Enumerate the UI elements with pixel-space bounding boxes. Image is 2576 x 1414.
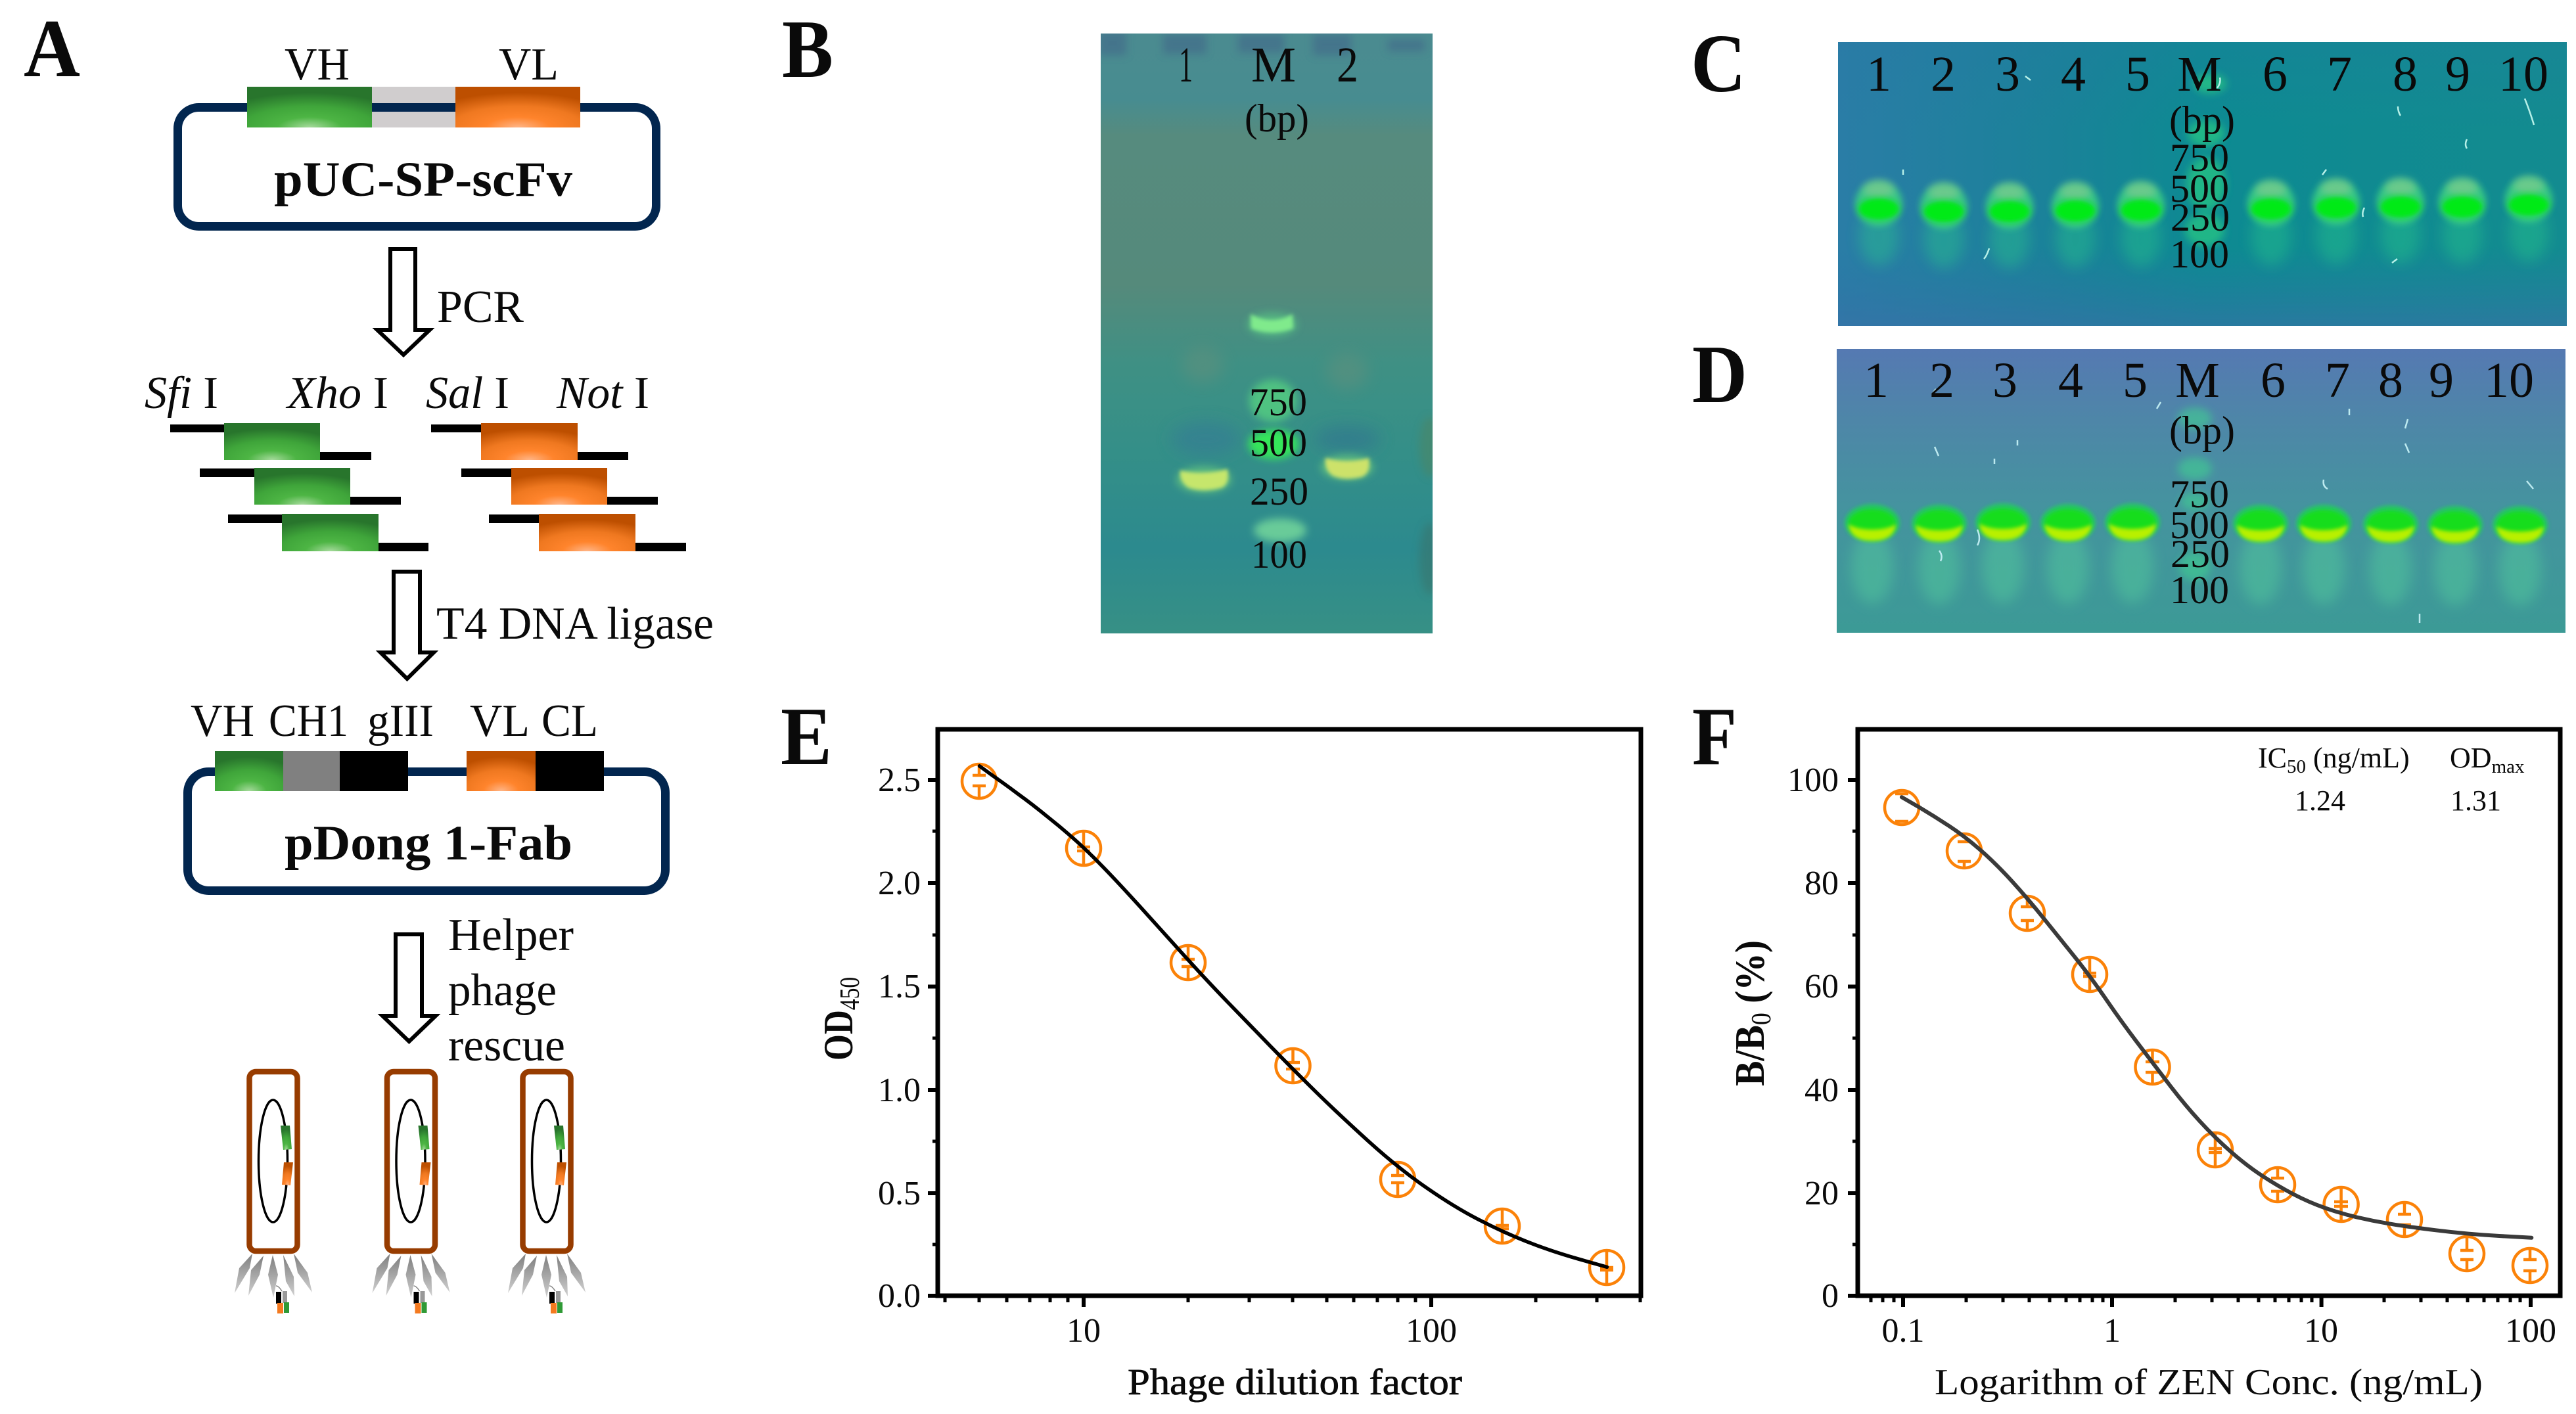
restriction site labels: Xho I xyxy=(285,368,388,419)
icon: E. coli cell 2 displaying Fab xyxy=(372,1072,449,1313)
legend values: 1.31 xyxy=(2450,785,2501,817)
gel image B: 500 xyxy=(1250,421,1307,465)
y tick labels: 100 xyxy=(1787,762,1839,799)
panel A: Fab library construction scheme xyxy=(24,3,714,1313)
gel image D: 6 xyxy=(2261,353,2286,408)
gel image B: 250 xyxy=(1250,470,1308,513)
gel image C: 1 xyxy=(1866,47,1891,102)
gel image D: 250 xyxy=(2171,532,2230,576)
lanes 1-10 bands xyxy=(1845,503,2548,606)
restriction site labels: Sal I xyxy=(426,368,509,419)
y tick labels: 80 xyxy=(1805,865,1839,902)
gel image C: M xyxy=(2177,47,2222,102)
y tick labels: 0.0 xyxy=(878,1277,921,1315)
gel image D: 3 xyxy=(1992,353,2017,408)
panel D: gel with VL products xyxy=(1692,329,2565,633)
gel image D: 1 xyxy=(1864,353,1889,408)
marker bands xyxy=(1247,313,1306,542)
plasmid: pDong 1-Fab: CL xyxy=(541,696,598,746)
restriction site labels xyxy=(145,368,649,419)
x tick labels: 10 xyxy=(1067,1312,1101,1350)
arrow: PCR xyxy=(377,249,524,355)
x tick labels: 1 xyxy=(2104,1312,2121,1350)
heading: E: E xyxy=(781,691,832,783)
panel F: competition inhibition curve xyxy=(1692,691,2560,1403)
x tick labels xyxy=(1067,1312,1457,1350)
gel image C: 5 xyxy=(2125,47,2150,102)
sample band lane 1 xyxy=(1176,467,1231,493)
y tick labels xyxy=(1787,762,1839,1315)
data points with error bars xyxy=(1885,790,2547,1283)
x tick labels: 100 xyxy=(1406,1312,1457,1350)
gel image D: 8 xyxy=(2378,353,2403,408)
y tick labels: 0.5 xyxy=(878,1175,921,1212)
plasmid: pDong 1-Fab: CH1 xyxy=(269,696,348,746)
y tick labels xyxy=(878,762,921,1315)
legend values: (ng/mL) xyxy=(2306,742,2410,774)
heading: C: C xyxy=(1691,18,1746,110)
gel image B: 1 xyxy=(1179,37,1193,93)
plasmid: pDong 1-Fab: gIII xyxy=(367,696,434,746)
gel image C: 4 xyxy=(2061,47,2086,102)
plasmid: pDong 1-Fab: VL xyxy=(470,696,530,746)
gel image B: (bp) xyxy=(1245,97,1309,140)
y axis title: B/B xyxy=(1727,1025,1774,1086)
legend values: 1.24 xyxy=(2295,785,2345,817)
restriction site labels: Not I xyxy=(556,368,649,419)
sample band lane 2 xyxy=(1321,455,1373,480)
gel image D: 100 xyxy=(2170,568,2229,612)
arrow: helper phage rescue xyxy=(382,910,574,1071)
fitted curve xyxy=(1902,797,2531,1238)
gel image B xyxy=(1099,32,1440,633)
heading: B: B xyxy=(782,4,833,95)
gel image C: 250 xyxy=(2171,196,2230,239)
restriction site labels: Sfi I xyxy=(145,368,218,419)
gel image C: 500 xyxy=(2170,167,2229,210)
gel image C: 3 xyxy=(1995,47,2020,102)
gel image D: M xyxy=(2175,353,2220,408)
gel image C xyxy=(1838,42,2567,326)
plasmid: pDong 1-Fab: pDong 1-Fab xyxy=(285,816,572,871)
y tick labels: 0 xyxy=(1822,1277,1839,1315)
gel image C: 100 xyxy=(2170,233,2229,276)
x tick labels: 10 xyxy=(2304,1312,2338,1350)
y tick labels: 20 xyxy=(1805,1175,1839,1212)
x tick labels xyxy=(1882,1312,2556,1350)
legend values: max xyxy=(2492,756,2525,777)
y tick labels: 1.0 xyxy=(878,1072,921,1109)
gel image D: 750 xyxy=(2170,472,2229,516)
gel image B: 750 xyxy=(1249,380,1307,424)
y tick labels: 2.0 xyxy=(878,865,921,902)
y tick labels: 60 xyxy=(1805,968,1839,1005)
gel image D xyxy=(1837,349,2565,633)
panel C: gel with VH products xyxy=(1691,18,2567,326)
fitted curve xyxy=(979,766,1607,1267)
icon: E. coli cell 3 displaying Fab xyxy=(508,1072,586,1313)
legend values xyxy=(2258,742,2525,817)
heading: D: D xyxy=(1692,329,1747,421)
gel image D: 7 xyxy=(2325,353,2350,408)
plasmid: pDong 1-Fab: VH xyxy=(191,696,254,746)
marker smears xyxy=(2178,407,2212,581)
gel image C: (bp) xyxy=(2169,99,2235,142)
lanes 1-10 bands xyxy=(1855,176,2552,268)
arrow: helper phage rescue: Helper xyxy=(448,910,574,961)
arrow: helper phage rescue: rescue xyxy=(448,1020,565,1071)
gel image D: 9 xyxy=(2429,353,2454,408)
x tick labels: 100 xyxy=(2505,1312,2556,1350)
y axis title: 0 xyxy=(1745,1013,1776,1025)
y tick labels: 1.5 xyxy=(878,968,921,1005)
y axis title: OD xyxy=(815,1010,862,1060)
x axis title: Logarithm of ZEN Conc. (ng/mL) xyxy=(1935,1362,2483,1403)
marker smears xyxy=(2185,74,2226,246)
gel image C: 750 xyxy=(2170,136,2229,179)
plasmid: pUC-SP-scFv xyxy=(177,39,656,226)
x axis title: Phage dilution factor xyxy=(1128,1362,1462,1403)
plasmid: pUC-SP-scFv: VH xyxy=(285,39,350,90)
heading: A: A xyxy=(24,3,80,95)
y axis title: (%) xyxy=(1727,940,1774,1013)
gel image D: 2 xyxy=(1929,353,1954,408)
gel image C: 10 xyxy=(2498,47,2548,102)
gel image D: (bp) xyxy=(2169,409,2235,452)
gel image D: 5 xyxy=(2123,353,2148,408)
gel image C: 9 xyxy=(2445,47,2470,102)
gel image C: 7 xyxy=(2327,47,2352,102)
gel image D: 4 xyxy=(2058,353,2083,408)
heading: F: F xyxy=(1692,691,1737,783)
plasmid: pDong 1-Fab xyxy=(188,696,665,891)
x tick labels: 0.1 xyxy=(1882,1312,1924,1350)
arrow: T4 DNA ligase: T4 DNA ligase xyxy=(436,599,714,649)
plasmid: pUC-SP-scFv: pUC-SP-scFv xyxy=(274,152,573,207)
PCR fragments: VH xyxy=(170,423,428,551)
gel image C: 8 xyxy=(2393,47,2418,102)
plasmid: pUC-SP-scFv: VL xyxy=(499,39,559,90)
axes frame and ticks xyxy=(928,729,1641,1307)
arrow: T4 DNA ligase xyxy=(380,572,714,679)
legend values: OD xyxy=(2450,742,2492,774)
gel image C: 2 xyxy=(1931,47,1956,102)
gel image B: 2 xyxy=(1337,37,1358,93)
PCR fragments: VL xyxy=(431,423,686,551)
axes frame and ticks xyxy=(1848,729,2560,1307)
y tick labels: 40 xyxy=(1805,1072,1839,1109)
arrow: PCR: PCR xyxy=(437,282,524,332)
y tick labels: 2.5 xyxy=(878,762,921,799)
panel E: phage dilution chart xyxy=(781,691,1641,1403)
gel image B: M xyxy=(1251,37,1296,93)
gel image D: 10 xyxy=(2484,353,2534,408)
data points with error bars xyxy=(962,764,1624,1285)
gel image D: 500 xyxy=(2170,503,2229,547)
panel B: agarose gel xyxy=(782,4,1440,633)
gel image C: 6 xyxy=(2263,47,2288,102)
icon: E. coli cell 1 displaying Fab xyxy=(235,1072,312,1313)
arrow: helper phage rescue: phage xyxy=(448,965,557,1016)
y axis title: 450 xyxy=(835,977,865,1010)
legend values: 50 xyxy=(2287,756,2306,777)
legend values: IC xyxy=(2258,742,2287,774)
gel image B: 100 xyxy=(1251,533,1307,576)
